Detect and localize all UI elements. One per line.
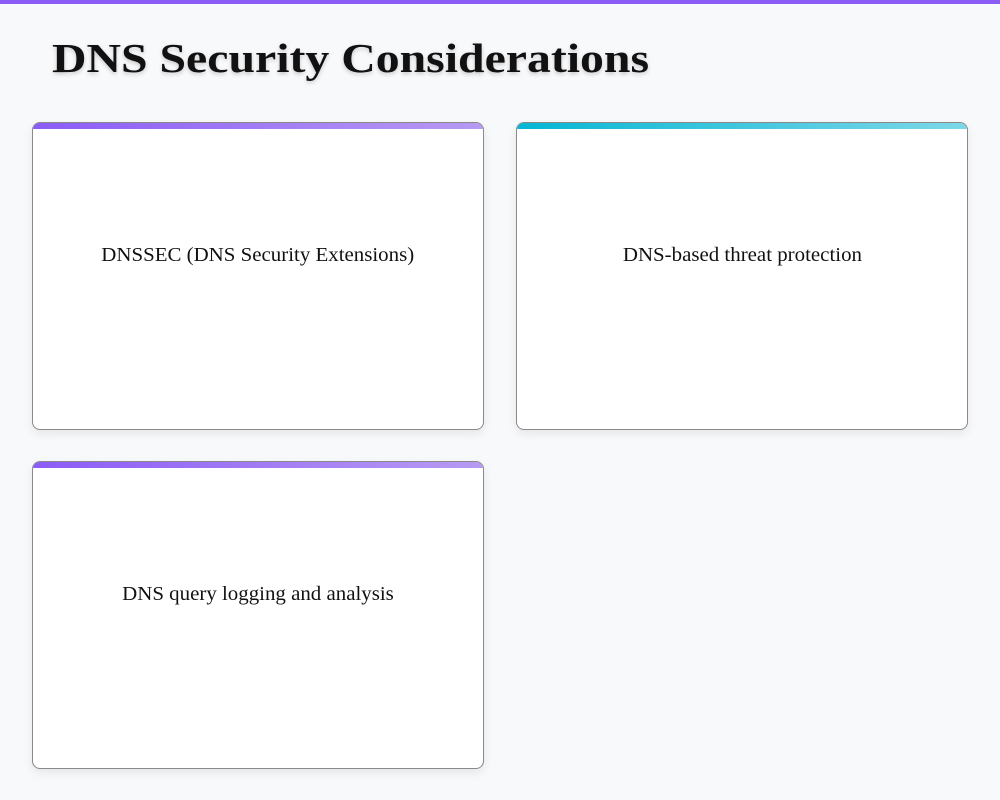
title: DNS Security Considerations: [52, 35, 649, 81]
panel: threat protection: [516, 122, 968, 430]
text: threat protection: DNS-based threat protection: [622, 244, 862, 266]
panel: DNSSEC: [32, 122, 484, 430]
panel: query logging: [32, 461, 484, 769]
text: DNSSEC: DNSSEC (DNS Security Extensions): [102, 244, 414, 266]
text: query logging: DNS query logging and analysis: [122, 582, 394, 604]
